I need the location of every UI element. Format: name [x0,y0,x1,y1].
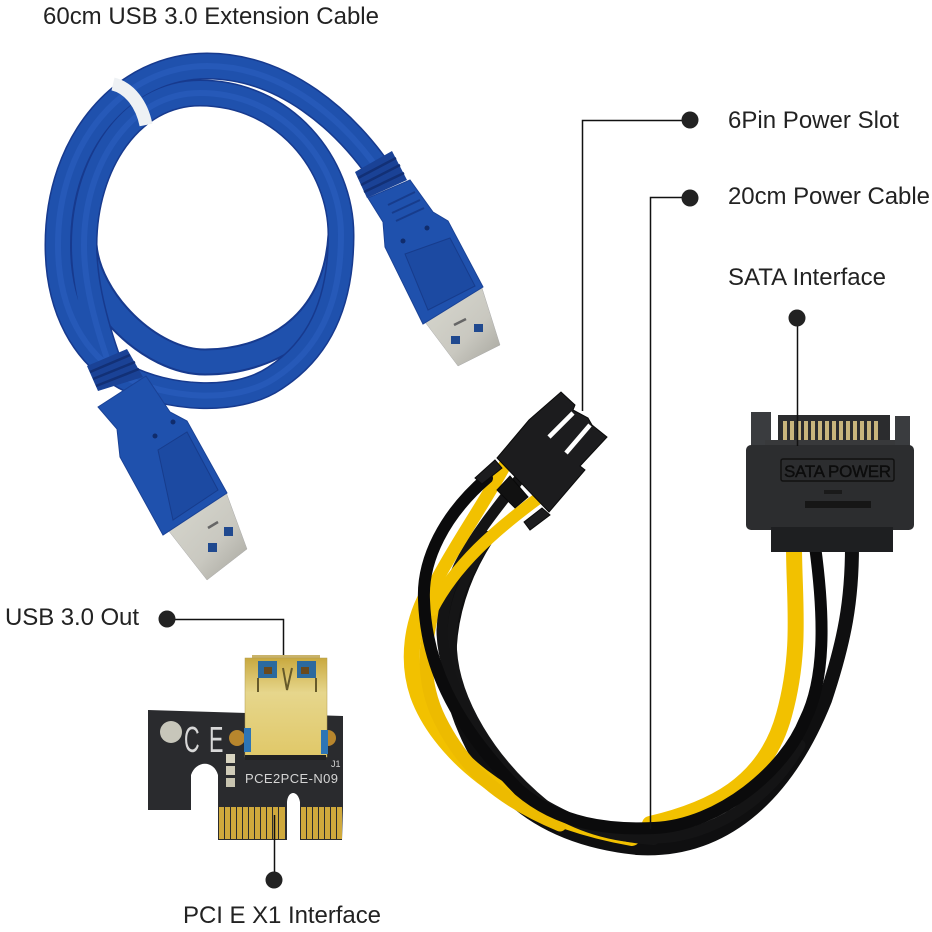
leader: SATA Interface: SATA Interface [728,264,886,291]
illustration: PCI-E riser card: J1 [331,759,341,769]
leader: USB 3.0 Out: USB 3.0 Out [5,604,139,631]
wires [412,465,852,848]
white cable tie [113,84,146,125]
mounting hole [160,721,182,743]
CE mark: C [184,720,200,760]
leader: 6Pin Power Slot: 6Pin Power Slot [728,107,899,134]
leader: SATA Interface [728,264,886,446]
upper USB plug [355,151,500,366]
cable loop [58,66,380,396]
leader: USB 3.0 Out [5,604,284,655]
leader: 20cm Power Cable [650,183,930,829]
leader: 20cm Power Cable: 20cm Power Cable [728,183,930,210]
lower USB plug [87,349,247,580]
SATA power connector [746,412,914,552]
circuit board [148,710,343,840]
USB 3.0 female port [244,655,328,760]
illustration: blue USB 3.0 extension cable [58,66,500,580]
CE mark: E [209,720,223,760]
gold fingers [219,807,342,839]
title: USB extension cable label: 60cm USB 3.0 Extension Cable [43,3,379,30]
leader: 6Pin Power Slot [582,107,899,411]
SATA power connector: SATA POWER [784,462,891,481]
illustration: SATA to 6-pin power cable [412,392,914,848]
CE mark [184,720,223,760]
board silkscreen text: PCE2PCE-N09 [245,771,338,786]
leader: PCI E X1 Interface: PCI E X1 Interface [183,902,381,929]
illustration: PCI-E riser card [148,655,343,840]
SATA gold contacts [783,421,878,442]
leader: PCI E X1 Interface [183,815,381,929]
6-pin PCIe connector [475,392,607,530]
